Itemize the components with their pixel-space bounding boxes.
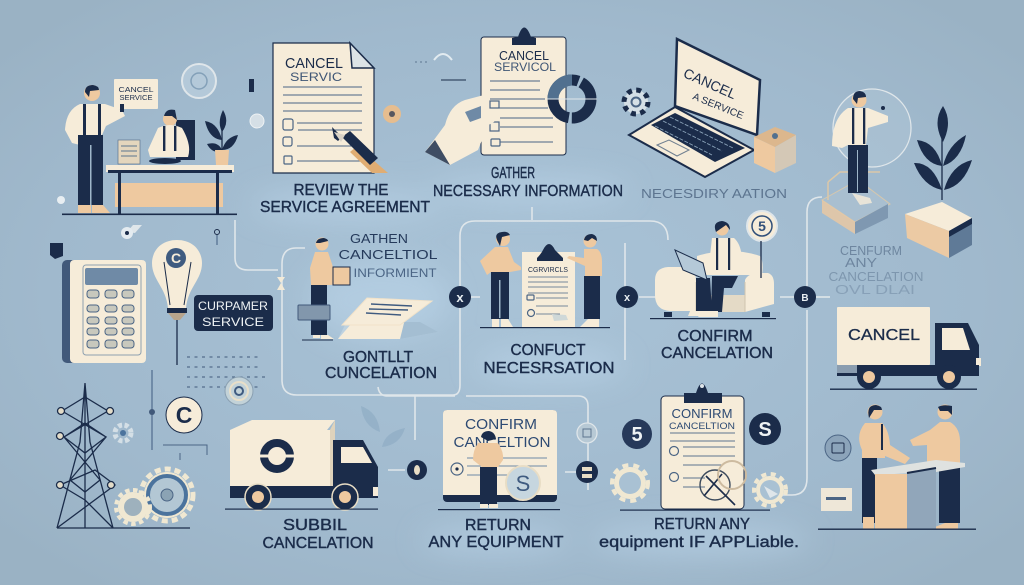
wheels — [857, 365, 961, 389]
small dots — [57, 79, 264, 204]
node circle — [794, 286, 816, 308]
label: SUBBIL — [283, 517, 347, 534]
panel: two people at counter — [818, 404, 976, 530]
title text: GATHEN — [350, 231, 408, 246]
panel: review the service agreement — [260, 43, 431, 216]
label: REVIEW THE — [294, 182, 388, 199]
icon: light bulb — [152, 240, 202, 365]
decorative leaves — [361, 406, 405, 447]
clipboard — [661, 384, 744, 509]
node circle — [616, 286, 638, 308]
truck body: CANCEL — [848, 327, 920, 344]
person left — [480, 232, 521, 327]
panel: conduct necessary conversation — [480, 232, 614, 377]
clipboard: CANCEL — [499, 48, 549, 63]
label — [661, 328, 773, 362]
panel: man on platform with globe and plant — [822, 89, 972, 297]
ground line — [818, 528, 976, 530]
faded label: NECESDIRY AATION — [641, 186, 787, 201]
man — [832, 91, 888, 205]
document: CANCEL — [285, 56, 343, 72]
screen: CANCELTION — [454, 434, 550, 451]
icon: left gear — [612, 465, 648, 501]
faded text: confirm any cancelation: CANCELATION — [828, 269, 924, 284]
armchair — [650, 251, 776, 319]
title text: INFORMIENT — [354, 266, 437, 280]
faded text: confirm any cancelation — [828, 243, 924, 297]
label: CANCELATION — [262, 535, 374, 552]
node circle — [449, 286, 471, 308]
icon: magnifier — [506, 466, 540, 500]
label: RETURN — [465, 517, 531, 534]
S badge: S — [758, 419, 772, 441]
faded ring icon — [577, 423, 597, 443]
icon: letter C badge: C — [176, 402, 192, 428]
ground line — [62, 214, 237, 215]
icon: decorative ring — [182, 64, 216, 98]
icon: globe — [833, 89, 911, 167]
node circle: B — [801, 293, 809, 304]
icon: letter C badge — [166, 397, 202, 433]
badge: customer service: SERVICE — [202, 317, 264, 329]
icon: calculator — [62, 260, 146, 363]
number 5 badge — [622, 419, 652, 449]
icon: envelope and paper — [338, 298, 438, 339]
icon: laptop — [629, 39, 760, 177]
left person — [859, 404, 910, 529]
right person — [910, 404, 960, 529]
node circle: x — [456, 290, 464, 305]
sign: cancel service — [114, 79, 158, 109]
sign: cancel service: CANCEL — [118, 85, 154, 94]
icon: pen — [332, 127, 388, 173]
label: GATHER — [491, 165, 535, 182]
ground line — [225, 508, 378, 510]
label: CONFIRM — [678, 328, 752, 345]
clipboard — [481, 28, 566, 155]
panel: person on armchair with laptop — [650, 211, 777, 362]
desk with seated worker — [106, 110, 234, 214]
label: CONFUCT — [510, 342, 586, 359]
icon: magnifier: S — [516, 471, 530, 496]
label: NECESRSATION — [484, 360, 614, 377]
panel: return any equipment — [428, 410, 564, 551]
label — [325, 349, 437, 382]
person — [473, 431, 503, 508]
label: CUNCELATION — [325, 365, 437, 382]
screen: CONFIRM — [465, 416, 537, 433]
icon: right gear — [754, 474, 786, 506]
icon: large box — [905, 202, 972, 258]
ground line — [620, 510, 770, 511]
label — [428, 517, 564, 551]
panel: truck with cancel — [830, 307, 981, 390]
document: SERVIC — [290, 70, 342, 84]
truck — [230, 420, 378, 510]
person with headset — [688, 221, 743, 317]
panel: return equipment if applicable — [599, 384, 799, 551]
badge — [747, 211, 777, 278]
dashed data lines — [187, 357, 266, 387]
icon: gears — [115, 425, 193, 524]
number 5 badge: 5 — [631, 424, 643, 446]
clipboard: CONFIRM — [672, 406, 732, 421]
standing man — [65, 85, 125, 213]
label: GONTLLT — [343, 349, 414, 366]
label: ANY EQUIPMENT — [428, 534, 564, 551]
faded text: confirm any cancelation: OVL DLAI — [835, 282, 915, 297]
label: NECESSARY INFORMATION — [433, 183, 623, 200]
person right — [567, 234, 602, 327]
icon: box — [754, 127, 796, 173]
icon: hand holding clipboard — [425, 95, 498, 165]
label — [599, 516, 799, 551]
small accents near document — [383, 54, 466, 123]
panel: laptop cancel a service — [624, 39, 796, 201]
title text: CANCELTIOL — [338, 247, 438, 262]
badge: 5 — [758, 218, 766, 234]
document with clip — [522, 244, 575, 327]
icon: gear — [624, 90, 648, 114]
icon: transmission tower — [56, 383, 190, 528]
label — [262, 517, 374, 552]
icon: laptop: A SERVICE — [691, 91, 745, 122]
truck body — [837, 307, 981, 376]
badge: customer service — [194, 295, 273, 331]
panel: calculator and customer service — [50, 225, 273, 528]
node circle — [576, 461, 598, 483]
icon: ring stamp — [825, 435, 851, 461]
icon: plant — [914, 106, 972, 200]
ground line — [830, 388, 977, 390]
icon: potted plant — [205, 110, 238, 165]
clipboard: SERVICOL — [494, 62, 557, 74]
node circle — [407, 460, 427, 480]
connector: hourglass — [277, 277, 285, 290]
label: SERVICE AGREEMENT — [260, 199, 431, 216]
document — [273, 43, 374, 173]
sign: cancel service: SERVICE — [120, 95, 153, 102]
icon: X mark and rings — [700, 461, 746, 505]
ground line — [480, 327, 610, 328]
S badge — [749, 413, 781, 445]
small accent marks — [121, 225, 220, 460]
label: RETURN ANY — [654, 516, 750, 533]
faded text: confirm any cancelation: CENFURM — [840, 243, 902, 258]
label: CANCELATION — [661, 345, 773, 362]
label: equipment IF APPLiable. — [599, 534, 799, 551]
label — [260, 182, 431, 216]
icon: laptop: CANCEL — [681, 65, 739, 102]
label — [433, 165, 623, 200]
clipboard: CANCELTION — [669, 421, 735, 432]
ground line — [438, 509, 560, 510]
panel: submit cancelation truck — [225, 406, 405, 552]
icon: laptop — [675, 250, 707, 280]
counter — [871, 460, 965, 529]
platform — [822, 172, 890, 234]
faded text: confirm any cancelation: ANY — [845, 255, 877, 270]
badge: customer service: CURPAMER — [198, 301, 268, 313]
man with papers and briefcase — [298, 238, 350, 340]
icon: light bulb: C — [171, 250, 181, 266]
label — [484, 342, 614, 377]
panel: person presenting at desk — [57, 64, 264, 215]
icon: concentric ring — [225, 377, 253, 405]
screen — [443, 410, 557, 502]
icon: card — [821, 488, 852, 511]
panel: gather cancellation information — [298, 231, 438, 382]
icon: flag — [50, 243, 63, 259]
title text — [338, 231, 438, 280]
document with clip: CGRVIRCLS — [528, 265, 568, 274]
panel: gather necessary information — [425, 28, 623, 200]
node circle: x — [624, 292, 631, 304]
icon: donut ring — [547, 80, 597, 118]
